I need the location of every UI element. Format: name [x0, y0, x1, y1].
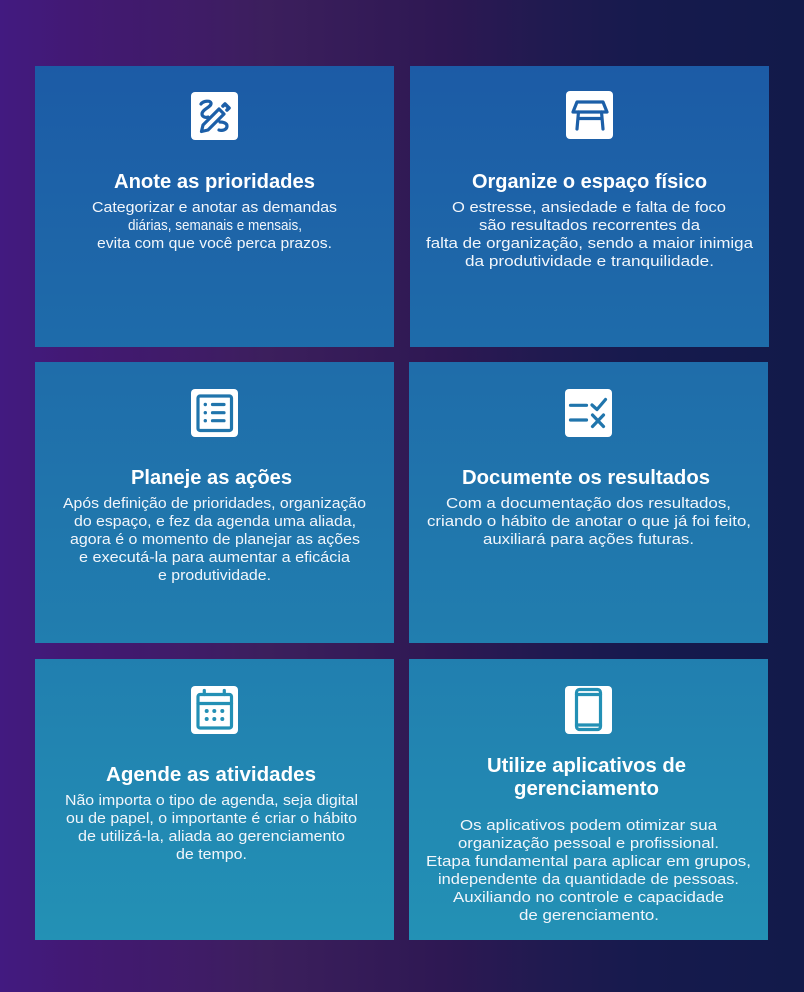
- text block: O estresse, ansiedade e falta de foco: [452, 199, 726, 216]
- text block: evita com que você perca prazos.: [97, 235, 332, 252]
- text block: falta de organização, sendo a maior inimiga: [426, 235, 754, 252]
- icon: pencil and squiggle: [191, 92, 238, 140]
- text block: Após definição de prioridades, organização: [63, 495, 366, 512]
- text block: [427, 495, 751, 548]
- heading: Agende as atividades: [106, 764, 316, 786]
- text block: Os aplicativos podem otimizar sua: [460, 817, 718, 834]
- text block: Auxiliando no controle e capacidade: [453, 889, 724, 906]
- text block: criando o hábito de anotar o que já foi feito,: [427, 513, 751, 530]
- text block: de utilizá-la, aliada ao gerenciamento: [78, 828, 345, 845]
- panel: Utilize aplicativos de gerenciamento: [409, 659, 768, 940]
- text block: e produtividade.: [158, 567, 271, 584]
- panel: Anote as prioridades: [35, 66, 394, 347]
- text block: diárias, semanais e mensais,: [128, 217, 302, 234]
- text block: da produtividade e tranquilidade.: [465, 253, 714, 270]
- panel: Agende as atividades: [35, 659, 394, 940]
- text block: [426, 817, 751, 924]
- text block: [63, 495, 366, 584]
- text block: do espaço, e fez da agenda uma aliada,: [74, 513, 356, 530]
- text block: [92, 199, 337, 252]
- text block: organização pessoal e profissional.: [458, 835, 719, 852]
- heading: Planeje as ações: [131, 467, 292, 489]
- text block: de tempo.: [176, 846, 247, 863]
- text block: Não importa o tipo de agenda, seja digital: [65, 792, 358, 809]
- panel: Planeje as ações: [35, 362, 394, 643]
- panel: Organize o espaço físico: [410, 66, 769, 347]
- icon: list: [191, 389, 238, 437]
- icon: calendar: [191, 686, 238, 734]
- heading: Organize o espaço físico: [472, 171, 707, 193]
- heading: Documente os resultados: [462, 467, 710, 489]
- panel: Documente os resultados: [409, 362, 768, 643]
- text block: [426, 199, 754, 270]
- heading: Anote as prioridades: [114, 171, 315, 193]
- icon: check and cross list: [565, 389, 612, 437]
- text block: ou de papel, o importante é criar o hábito: [66, 810, 357, 827]
- text block: independente da quantidade de pessoas.: [438, 871, 739, 888]
- heading: gerenciamento: [514, 778, 659, 800]
- text block: Com a documentação dos resultados,: [446, 495, 731, 512]
- text block: Etapa fundamental para aplicar em grupos,: [426, 853, 751, 870]
- icon: smartphone: [565, 686, 612, 734]
- text block: são resultados recorrentes da: [479, 217, 701, 234]
- text block: [65, 792, 358, 863]
- icon: table: [566, 91, 613, 139]
- heading: Utilize aplicativos de: [487, 755, 686, 777]
- heading: [487, 755, 686, 800]
- text block: Categorizar e anotar as demandas: [92, 199, 337, 216]
- text block: e executá-la para aumentar a eficácia: [79, 549, 351, 566]
- text block: agora é o momento de planejar as ações: [70, 531, 360, 548]
- text block: de gerenciamento.: [519, 907, 659, 924]
- text block: auxiliará para ações futuras.: [483, 531, 694, 548]
